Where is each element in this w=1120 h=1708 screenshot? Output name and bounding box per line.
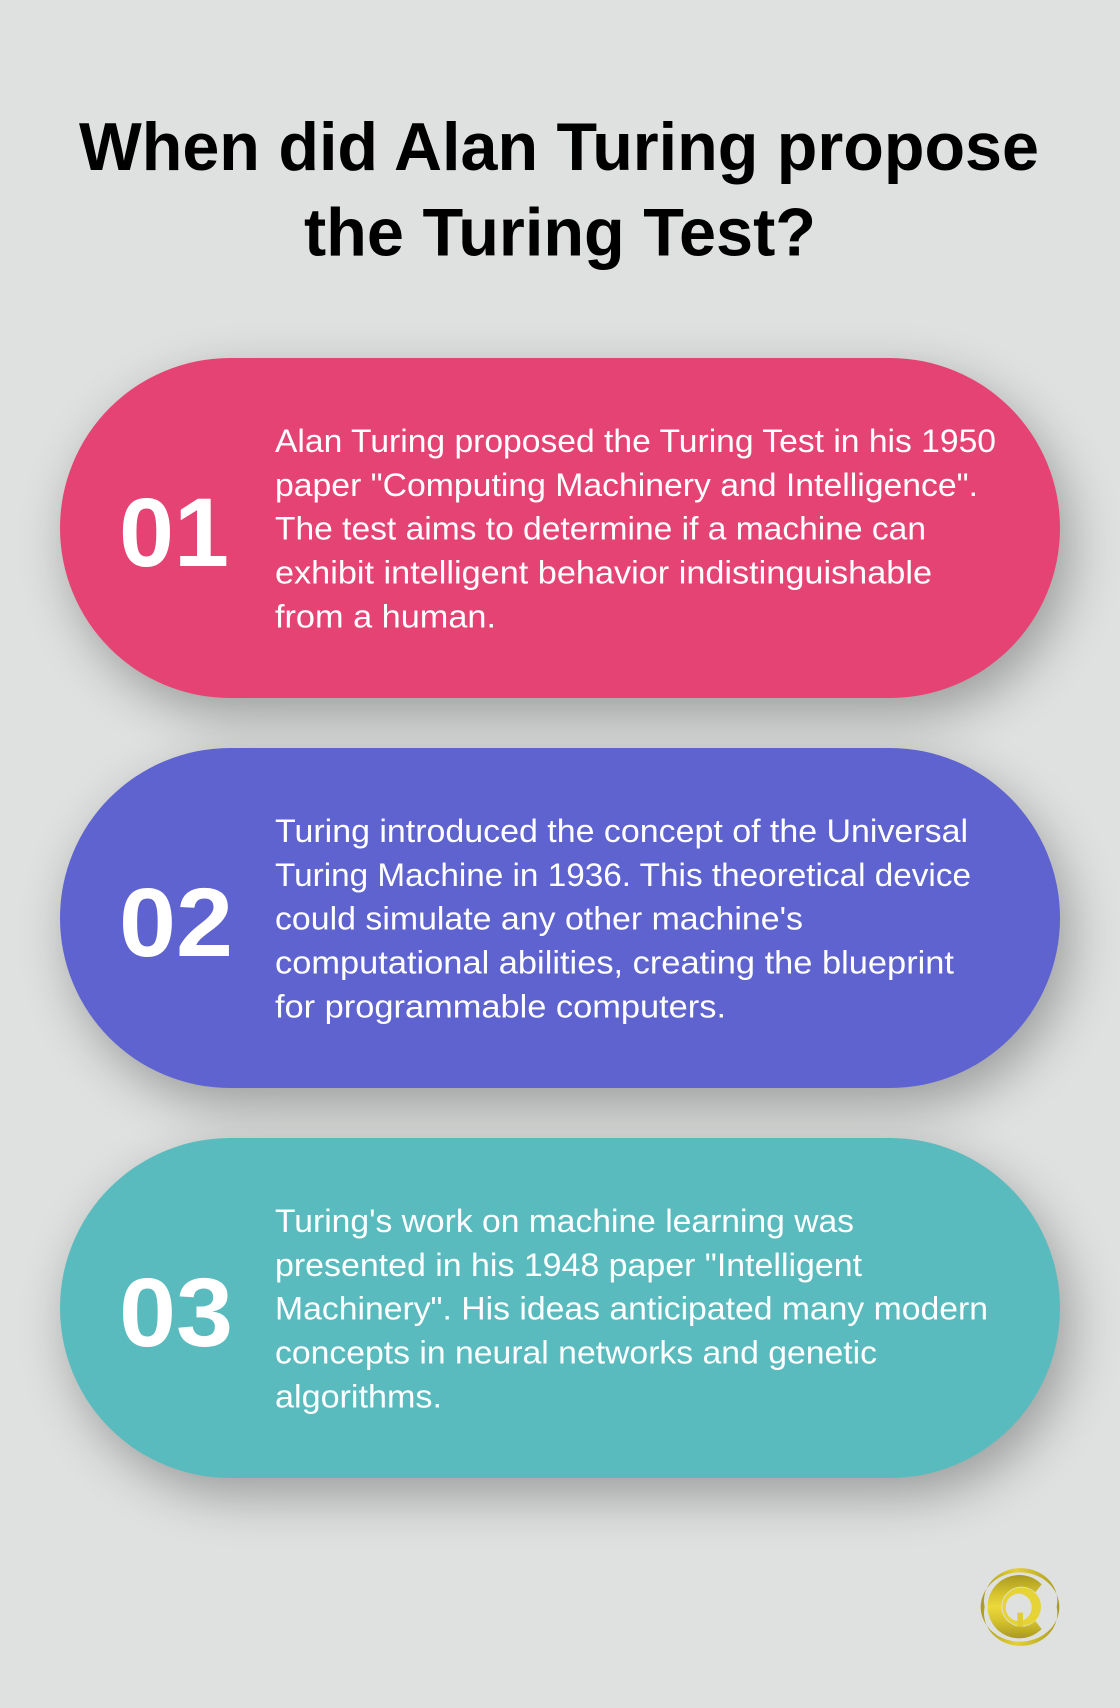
- step 01 text: Alan Turing proposed the Turing Test in his 1950: [275, 423, 996, 459]
- step 01 text: [275, 423, 996, 634]
- step 01 text: exhibit intelligent behavior indistinguishable: [275, 555, 932, 591]
- step 01 text: paper "Computing Machinery and Intelligence".: [275, 467, 978, 503]
- icon: gold CQ logo: [980, 1568, 1060, 1646]
- step 01 text: from a human.: [275, 598, 496, 634]
- step 02 text: for programmable computers.: [275, 988, 726, 1024]
- step 03 text: algorithms.: [275, 1378, 442, 1414]
- step 03 text: presented in his 1948 paper "Intelligent: [275, 1247, 862, 1283]
- title: the Turing Test?: [304, 195, 816, 271]
- step 02 text: could simulate any other machine's: [275, 901, 803, 937]
- step 02 text: [275, 813, 971, 1024]
- step 03 text: [275, 1203, 988, 1414]
- step 02 text: computational abilities, creating the blueprint: [275, 945, 954, 981]
- step number 01: 01: [119, 478, 229, 587]
- step 03 text: concepts in neural networks and genetic: [275, 1335, 877, 1371]
- step 03 text: Machinery". His ideas anticipated many modern: [275, 1291, 988, 1327]
- title: When did Alan Turing propose: [79, 109, 1039, 185]
- step 01 text: The test aims to determine if a machine can: [275, 511, 926, 547]
- step number 02: 02: [119, 868, 233, 977]
- step 02 text: Turing Machine in 1936. This theoretical device: [275, 857, 971, 893]
- step 02 text: Turing introduced the concept of the Universal: [275, 813, 968, 849]
- panel: step 01: [60, 358, 1060, 698]
- panel: step 03: [60, 1138, 1060, 1478]
- step number 03: 03: [119, 1258, 233, 1367]
- panel: step 02: [60, 748, 1060, 1088]
- step 03 text: Turing's work on machine learning was: [275, 1203, 854, 1239]
- title: [79, 109, 1039, 271]
